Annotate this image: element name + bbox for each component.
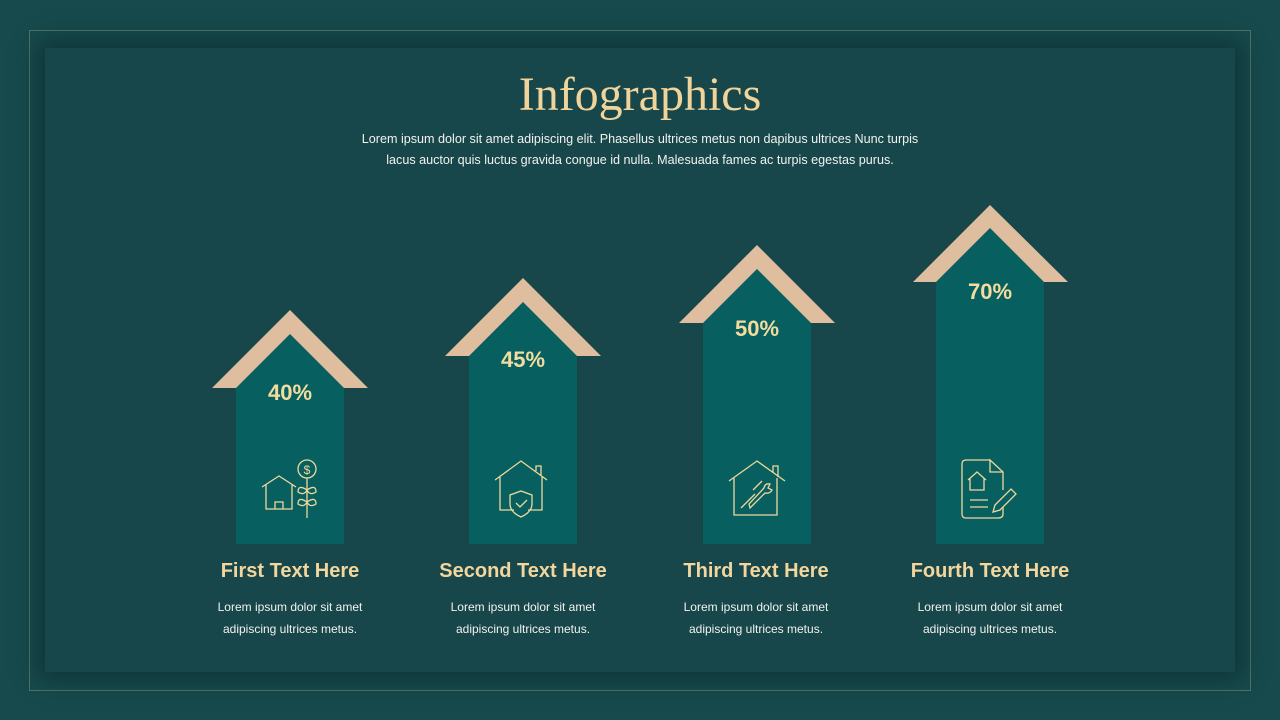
subtitle text: Lorem ipsum dolor sit amet adipiscing elit. Phasellus ultrices metus non dapibus ultrices Nunc turpis	[362, 132, 918, 146]
label 3: Third Text Here	[683, 560, 829, 582]
icon: house with money plant	[262, 460, 316, 518]
bar 4: 70%	[968, 279, 1012, 304]
label 1: First Text Here	[221, 560, 359, 582]
label 2: Second Text Here	[439, 560, 607, 582]
bar 1: 40%	[268, 380, 312, 405]
title: Infographics	[519, 68, 761, 121]
icon: document with house and pen	[962, 460, 1016, 518]
subtitle text	[362, 132, 918, 167]
bar 2: 45%	[501, 347, 545, 372]
desc 4: adipiscing ultrices metus.	[923, 622, 1057, 636]
bar 3: 50%	[735, 316, 779, 341]
desc 2: adipiscing ultrices metus.	[456, 622, 590, 636]
bar 1	[212, 310, 368, 544]
desc 2	[451, 600, 596, 636]
desc 2: Lorem ipsum dolor sit amet	[451, 600, 595, 614]
label 4: Fourth Text Here	[911, 560, 1069, 582]
desc 3: Lorem ipsum dolor sit amet	[684, 600, 828, 614]
icon: house with money plant: $	[304, 463, 311, 477]
bar 4	[913, 205, 1068, 544]
icon: house with tools	[729, 461, 785, 515]
desc 3: adipiscing ultrices metus.	[689, 622, 823, 636]
bar 2	[445, 278, 601, 544]
desc 1: adipiscing ultrices metus.	[223, 622, 357, 636]
subtitle text: lacus auctor quis luctus gravida congue id nulla. Malesuada fames ac turpis egestas purus.	[386, 153, 894, 167]
desc 3	[684, 600, 828, 636]
desc 1: Lorem ipsum dolor sit amet	[218, 600, 362, 614]
desc 1	[218, 600, 362, 636]
bar 3	[679, 245, 835, 544]
desc 4	[918, 600, 1062, 636]
icon: house with shield	[495, 461, 547, 517]
desc 4: Lorem ipsum dolor sit amet	[918, 600, 1062, 614]
